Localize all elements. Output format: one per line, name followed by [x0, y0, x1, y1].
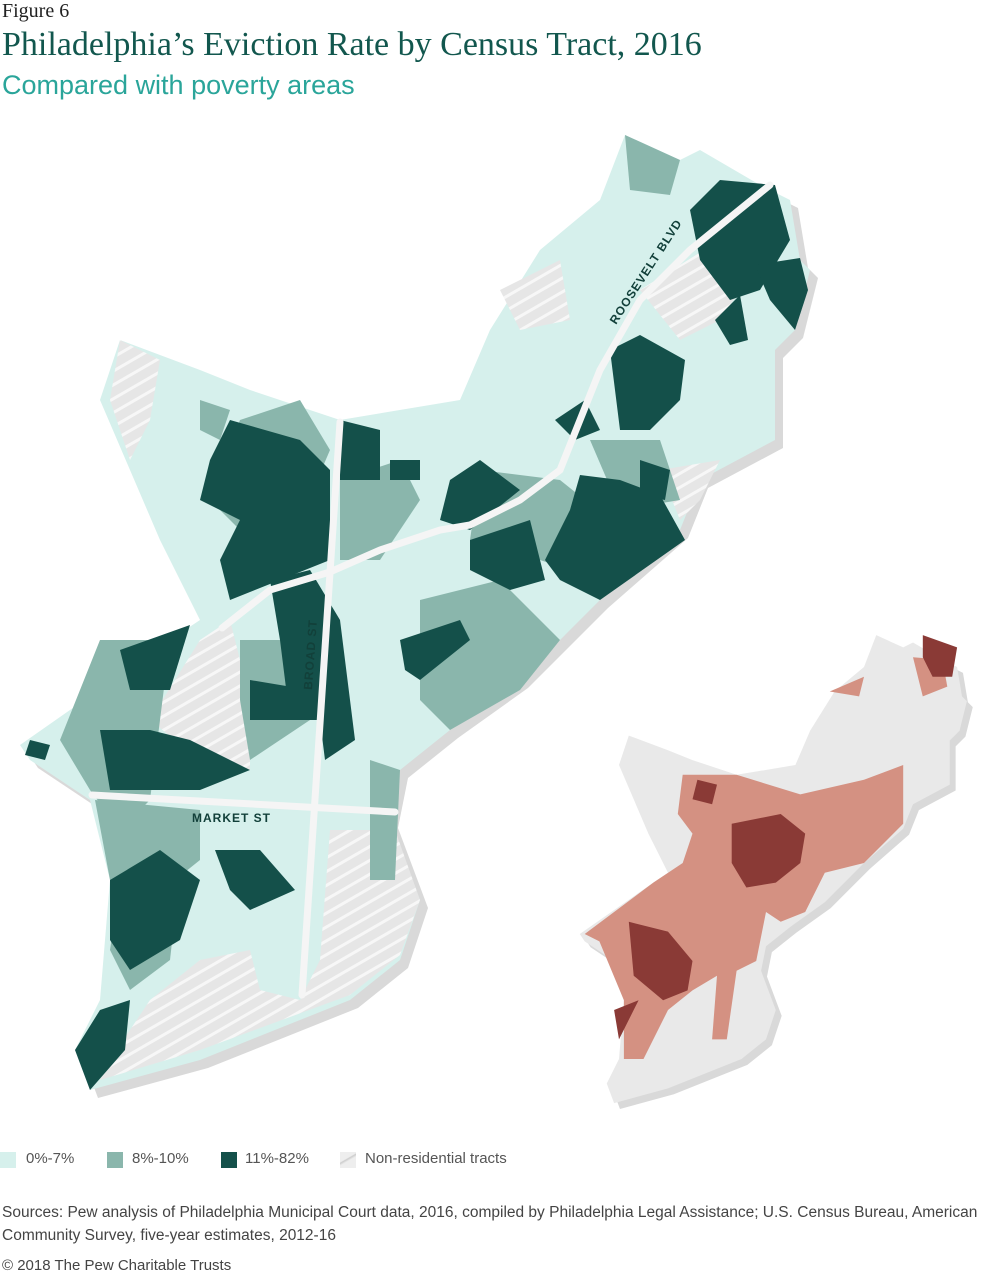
legend	[0, 1150, 507, 1168]
title: Philadelphia’s Eviction Rate by Census Tract, 2016	[2, 26, 702, 63]
legend: 8%-10%	[132, 1150, 189, 1167]
legend: 0-7	[0, 1150, 74, 1168]
figure label: Figure 6	[2, 0, 69, 22]
main map	[20, 135, 818, 1098]
road labels: MARKET ST	[192, 811, 271, 825]
non-residential hatched areas	[100, 240, 760, 1080]
legend: 11-82	[221, 1150, 309, 1168]
road labels: ROOSEVELT BLVD	[607, 216, 685, 327]
roads	[92, 185, 770, 995]
legend: 8-10	[107, 1150, 189, 1168]
legend: non-residential	[340, 1150, 507, 1168]
subtitle: Compared with poverty areas	[2, 70, 355, 100]
sources: Sources: Pew analysis of Philadelphia Municipal Court data, 2016, compiled by Philadelphia Legal Assistance; U.S. Census Bureau, American Community Survey, five-year estimates, 2012-16	[2, 1204, 977, 1244]
road labels: BROAD ST	[301, 619, 320, 690]
poverty map	[580, 635, 973, 1109]
road labels	[192, 216, 685, 825]
medium tracts	[60, 135, 680, 990]
legend: Non-residential tracts	[365, 1150, 507, 1167]
dark tracts	[25, 180, 808, 1090]
copyright: © 2018 The Pew Charitable Trusts	[2, 1257, 231, 1274]
legend: 11%-82%	[245, 1150, 309, 1167]
legend: 0%-7%	[26, 1150, 74, 1167]
